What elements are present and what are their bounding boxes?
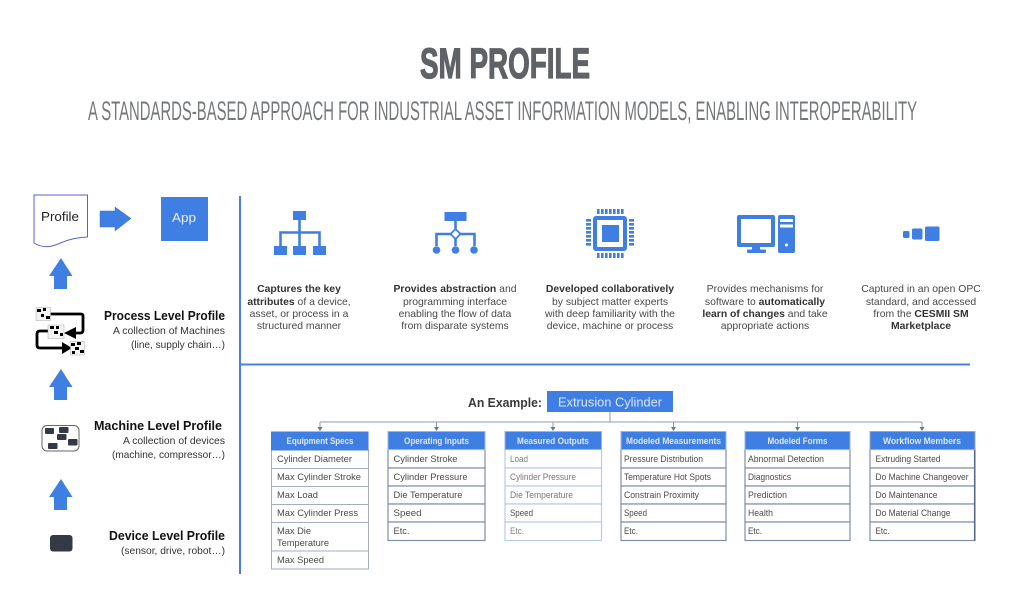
text: marketplace: from the CESMII SM [873, 309, 969, 320]
text: collaboration: device, machine or process [547, 321, 673, 332]
icon: blocks [903, 226, 940, 241]
text: marketplace: Marketplace [891, 321, 951, 332]
text: abstraction: enabling the flow of data [399, 309, 512, 320]
text: marketplace: standard, and accessed [866, 297, 976, 308]
table: modeled measurements: Pressure Distribution [624, 454, 703, 464]
label: device level profile: Device Level Profile [109, 528, 225, 543]
label: device level profile: (sensor, drive, robot…) [121, 546, 225, 557]
label: machine level profile: Machine Level Profile [94, 418, 222, 433]
table: measured outputs: Etc. [510, 526, 524, 536]
table: workflow members: Do Material Change [876, 508, 950, 518]
table: measured outputs: Load [510, 454, 528, 464]
icon: abstraction [433, 212, 478, 254]
app box [161, 197, 208, 241]
text: captures: attributes of a device, [247, 297, 351, 308]
table: modeled measurements: Temperature Hot Spots [624, 472, 711, 482]
arrow: up to profile [49, 258, 72, 289]
table: modeled forms: Abnormal Detection [748, 454, 824, 464]
app box: App [172, 211, 196, 225]
table: workflow members: Do Machine Changeover [876, 472, 968, 482]
table: modeled forms [745, 432, 850, 540]
icon: computer [737, 215, 795, 253]
label: process level profile [104, 308, 225, 351]
icon: profile document: Profile [41, 210, 79, 224]
panel: characteristics [247, 209, 981, 332]
table: operating inputs: Cylinder Pressure [394, 472, 468, 482]
connectors [318, 412, 924, 431]
arrow: up to process [49, 369, 72, 400]
text: marketplace: Captured in an open OPC [861, 284, 981, 295]
table: modeled forms: Etc. [748, 526, 762, 536]
table: equipment specs: Max Die [277, 526, 311, 536]
table: workflow members: Extruding Started [876, 454, 940, 464]
text: captures: Captures the key [257, 284, 341, 295]
table: modeled measurements: Etc. [624, 526, 638, 536]
text: mechanisms: learn of changes and take [702, 309, 828, 320]
icon: process level [36, 308, 84, 355]
text: collaboration: with deep familiarity with the [544, 309, 675, 320]
table: equipment specs: Temperature [277, 538, 329, 548]
table: modeled measurements: Constrain Proximity [624, 490, 699, 500]
text: mechanisms: appropriate actions [721, 321, 809, 332]
table: workflow members: Etc. [876, 526, 890, 536]
text: abstraction: from disparate systems [401, 321, 509, 332]
text: collaboration: Developed collaboratively [546, 284, 674, 295]
table: modeled forms: Modeled Forms [768, 436, 828, 446]
table: equipment specs: Max Cylinder Stroke [277, 472, 361, 482]
label: device level profile [109, 528, 225, 557]
table: measured outputs [505, 432, 602, 540]
table: modeled forms: Health [748, 508, 773, 518]
label: machine level profile: (machine, compressor…) [112, 450, 225, 461]
title: SM PROFILE [420, 40, 590, 88]
text: collaboration: by subject matter experts [552, 297, 668, 308]
arrow: profile to app [100, 207, 131, 231]
arrow: up to machine [49, 479, 72, 510]
text: captures: asset, or process in a [250, 309, 349, 320]
label: process level profile: Process Level Profile [104, 308, 225, 323]
label: process level profile: A collection of Machines [113, 326, 225, 337]
table: workflow members [870, 432, 976, 541]
extrusion cylinder box [547, 391, 673, 412]
table: modeled forms: Prediction [748, 490, 787, 500]
panel: example [271, 391, 976, 569]
table: workflow members: Workflow Members [883, 436, 961, 446]
icon: machine level [42, 426, 79, 451]
table: modeled measurements: Modeled Measurements [626, 436, 721, 446]
table: equipment specs: Cylinder Diameter [277, 454, 352, 464]
table: operating inputs: Cylinder Stroke [394, 454, 458, 464]
icon: hierarchy [274, 211, 326, 255]
label: process level profile: (line, supply chain…) [131, 340, 225, 351]
table: equipment specs: Max Speed [277, 555, 324, 565]
table: equipment specs [271, 432, 368, 569]
label: machine level profile: A collection of devices [123, 436, 225, 447]
text: mechanisms: Provides mechanisms for [707, 284, 824, 295]
table: equipment specs: Equipment Specs [286, 436, 354, 446]
text: mechanisms: software to automatically [705, 297, 825, 308]
table: operating inputs: Speed [394, 508, 422, 518]
table: operating inputs [388, 432, 485, 540]
table: measured outputs: Measured Outputs [517, 436, 589, 446]
text: captures: structured manner [257, 321, 342, 332]
text: abstraction: Provides abstraction and [393, 284, 517, 295]
extrusion cylinder box: Extrusion Cylinder [558, 396, 662, 410]
table: operating inputs: Die Temperature [394, 490, 462, 500]
table: operating inputs: Operating Inputs [404, 436, 469, 446]
table: modeled measurements: Speed [624, 508, 647, 518]
table: measured outputs: Speed [510, 508, 533, 518]
table: measured outputs: Cylinder Pressure [510, 472, 576, 482]
example heading: An Example: [468, 395, 542, 410]
icon: profile document [34, 195, 88, 247]
icon: device level [50, 535, 72, 552]
table: modeled forms: Diagnostics [748, 472, 791, 482]
table: measured outputs: Die Temperature [510, 490, 573, 500]
horizontal divider [240, 364, 970, 366]
text: abstraction: programming interface [403, 297, 507, 308]
vertical divider [239, 196, 241, 574]
label: machine level profile [94, 418, 225, 461]
panel: profile hierarchy [34, 195, 225, 557]
icon: chip [586, 209, 634, 258]
table: equipment specs: Max Cylinder Press [277, 508, 358, 518]
table: modeled measurements [621, 432, 726, 540]
table: operating inputs: Etc. [394, 526, 410, 536]
table: equipment specs: Max Load [277, 490, 318, 500]
table: workflow members: Do Maintenance [876, 490, 938, 500]
